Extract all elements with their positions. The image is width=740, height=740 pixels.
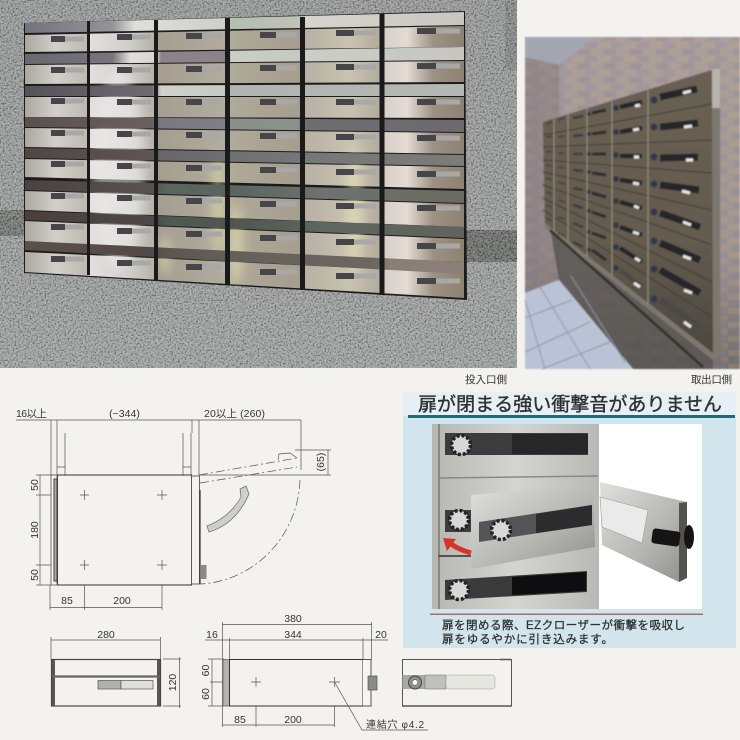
dimension labels: 50	[29, 569, 41, 581]
photo: mail slot side installed on granite wall	[0, 0, 517, 368]
mounting crosses	[251, 677, 340, 687]
dimension labels: 16以上	[16, 408, 47, 420]
drawing: top plan view with door swing	[16, 408, 331, 610]
leader line	[334, 682, 428, 730]
caption rule	[430, 614, 703, 615]
locks	[587, 96, 658, 302]
mailbox panel backing	[24, 11, 467, 300]
dimension labels: 60	[200, 665, 212, 676]
dimension lines	[16, 420, 331, 610]
top flaps of each row	[25, 12, 464, 274]
lower slot	[445, 571, 587, 600]
slot openings	[660, 89, 700, 293]
width and height labels: 280	[97, 629, 115, 641]
name plates	[65, 31, 460, 281]
white closer bar	[600, 497, 648, 543]
heading rule	[408, 415, 735, 418]
column gaps	[88, 14, 382, 295]
door fronts	[25, 26, 464, 298]
drawing: side view	[200, 613, 428, 731]
dimension labels: 20以上 (260)	[204, 408, 265, 420]
dimension labels: 200	[113, 595, 131, 607]
drawing: front view	[51, 629, 181, 708]
dimension labels: 180	[29, 521, 41, 539]
photo: open mailbox door with closer	[432, 424, 702, 609]
caption: mail slot side: 投入口側	[465, 373, 507, 386]
mounting crosses	[80, 490, 167, 570]
door reflections	[92, 70, 363, 285]
caption text: 扉を閉める際、EZクローザーが衝撃を吸収し	[442, 618, 685, 632]
dimension labels: 380	[284, 613, 302, 625]
dimension labels: 16	[206, 629, 218, 641]
black lock body	[651, 525, 694, 549]
dimension labels: 60	[200, 688, 212, 700]
dials	[450, 436, 510, 600]
swing arrow	[207, 486, 249, 532]
caption text	[442, 618, 685, 646]
dimension labels: 20	[375, 629, 387, 641]
open outer door	[600, 482, 687, 582]
granite wall	[0, 0, 517, 368]
dimension labels: (~344)	[109, 408, 140, 420]
heading: 扉が閉まる強い衝撃音がありません	[418, 394, 722, 416]
dimension labels	[16, 408, 327, 607]
panel: closer feature callout	[403, 392, 736, 648]
width and height labels	[97, 629, 179, 691]
wall bracket and body	[58, 475, 192, 585]
heading background	[403, 392, 736, 416]
fixed slot behind open door	[445, 510, 475, 532]
dimension labels: 200	[284, 714, 302, 726]
lock dial	[408, 676, 422, 689]
dimension labels: 85	[234, 714, 246, 726]
caption: retrieval side: 取出口側	[691, 373, 732, 386]
dimension labels: 85	[61, 595, 73, 607]
width and height labels: 120	[167, 674, 179, 691]
open door swing	[199, 458, 300, 584]
mailbox bank	[543, 68, 720, 367]
name plate	[98, 680, 153, 689]
upper slot	[445, 433, 588, 455]
mail slot windows	[51, 31, 436, 281]
drawing: rear view	[402, 660, 512, 706]
tiled walls and ceiling	[525, 37, 740, 369]
dimension labels: (65)	[315, 453, 327, 471]
name tags	[633, 91, 693, 327]
red closing arrow	[443, 538, 471, 553]
caption text: 扉をゆるやかに引き込みます。	[442, 632, 613, 646]
dimension labels: 50	[29, 479, 41, 491]
inner door leaf	[471, 484, 595, 569]
dimension labels: 344	[284, 629, 302, 641]
dimension labels: 連結穴 φ4.2	[366, 718, 424, 731]
photo: retrieval side in tiled entrance	[525, 37, 740, 369]
dimension labels	[200, 613, 424, 731]
